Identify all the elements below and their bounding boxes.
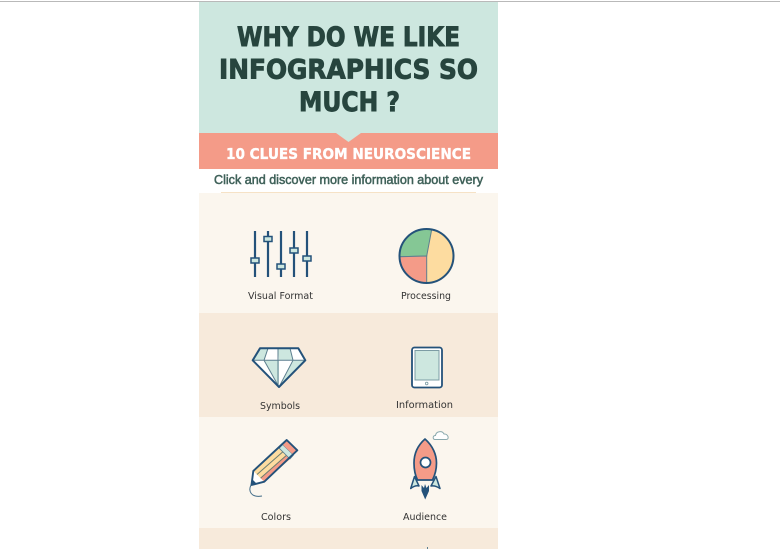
- icon: tablet: [412, 348, 442, 388]
- subtitle banner: [199, 133, 498, 169]
- row 1 background: [199, 193, 498, 313]
- row 3 background: [199, 417, 498, 528]
- label: Colors: Colors: [261, 512, 291, 523]
- icon: cloud: [433, 432, 448, 440]
- title: WHY DO WE LIKE: [237, 22, 460, 53]
- icon: pencil: [250, 440, 297, 496]
- icon: pie chart: [400, 229, 454, 283]
- row 4 background: [199, 528, 498, 549]
- instruction text: Click and discover more information about every: [214, 173, 484, 187]
- icon: rocket: [411, 439, 440, 500]
- label: Symbols: Symbols: [260, 401, 300, 412]
- label: Audience: Audience: [403, 512, 447, 523]
- subtitle banner: 10 CLUES FROM NEUROSCIENCE: [226, 145, 471, 163]
- label: Visual Format: Visual Format: [248, 291, 313, 302]
- icon: diamond: [253, 348, 305, 387]
- icon: next row top tip: [427, 547, 428, 549]
- title: MUCH ?: [299, 87, 400, 118]
- row 2 background: [199, 313, 498, 417]
- title: INFOGRAPHICS SO: [219, 54, 478, 86]
- label: Information: Information: [396, 400, 453, 411]
- icon: sliders: [251, 231, 311, 277]
- title: [219, 22, 478, 118]
- label: Processing: Processing: [401, 291, 451, 302]
- header panel: [199, 2, 498, 133]
